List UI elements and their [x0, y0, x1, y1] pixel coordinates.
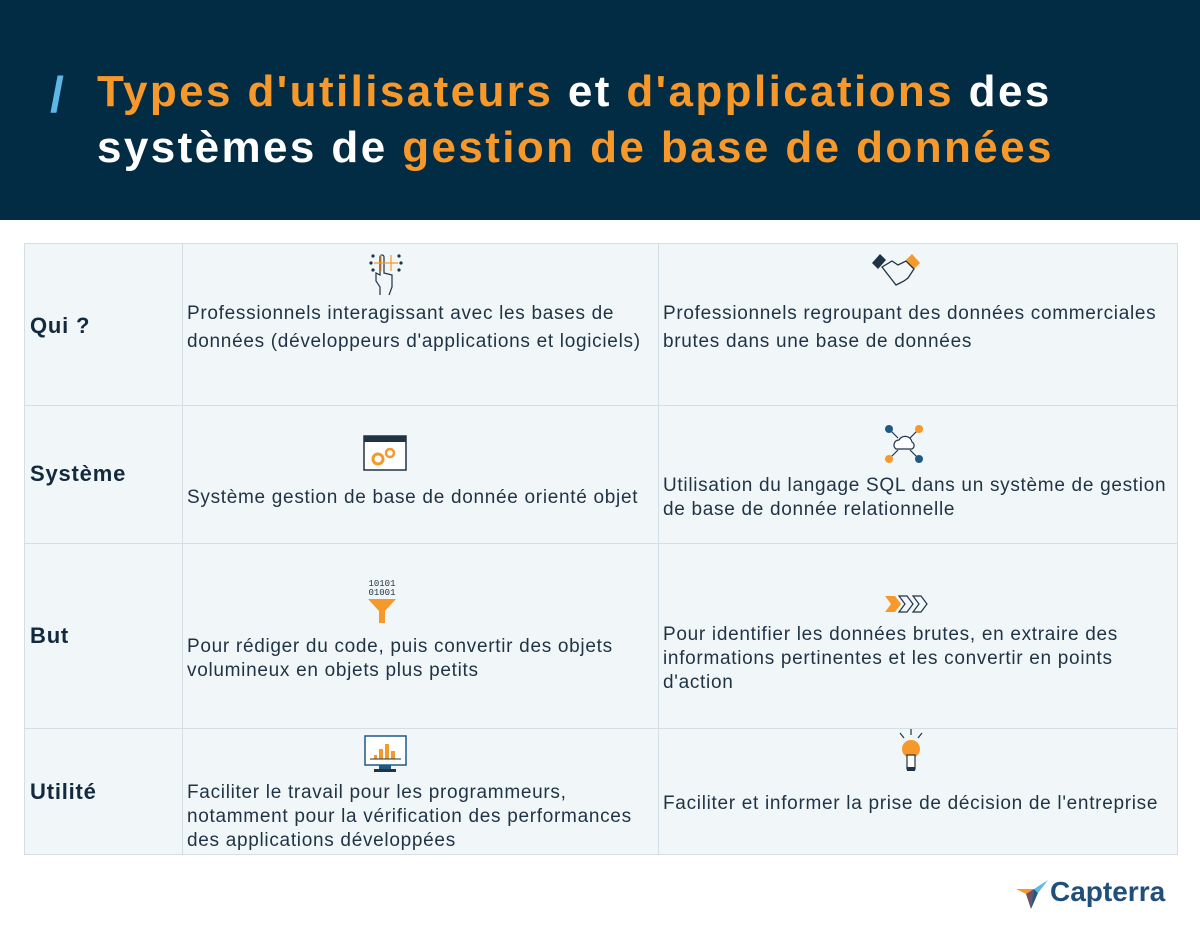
icon: monitor chart [364, 735, 407, 772]
text: qui col1: Professionnels interagissant avec les bases de [187, 303, 614, 324]
text: systeme col1: Système gestion de base de donnée orienté objet [187, 487, 638, 508]
title [97, 67, 1054, 172]
slash accent: / [50, 67, 64, 123]
text: qui col2: brutes dans une base de données [663, 331, 972, 352]
text: qui col2 [663, 303, 1156, 352]
text: but col1 [187, 636, 613, 681]
text: but col1: volumineux en objets plus petits [187, 660, 479, 681]
text: systeme col2 [663, 475, 1166, 520]
table [24, 243, 1178, 855]
text: utilite col2: Faciliter et informer la prise de décision de l'entreprise [663, 793, 1158, 814]
text: but col2: Pour identifier les données brutes, en extraire des [663, 624, 1118, 645]
text: but col2: informations pertinentes et les convertir en points [663, 648, 1113, 669]
icon: gears window [363, 435, 407, 471]
logo: Capterra: Capterra [1050, 876, 1165, 907]
icon: binary funnel [368, 579, 396, 623]
icon: binary funnel: 01001 [368, 588, 396, 598]
text: qui col1 [187, 303, 641, 352]
text: systeme col2: de base de donnée relationnelle [663, 499, 955, 520]
text: but col1: Pour rédiger du code, puis convertir des objets [187, 636, 613, 657]
row label: Utilité: Utilité [30, 779, 97, 804]
title: Types d'utilisateurs et d'applications des [97, 67, 1052, 116]
icon: touch hand [369, 254, 403, 296]
text: utilite col1: notamment pour la vérification des performances [187, 806, 632, 827]
text: utilite col1 [187, 782, 632, 851]
header band [0, 0, 1200, 220]
text: qui col1: données (développeurs d'applications et logiciels) [187, 331, 641, 352]
row label: Système: Système [30, 461, 126, 486]
icon: lightbulb [900, 729, 922, 771]
text: but col2 [663, 624, 1118, 693]
text: systeme col2: Utilisation du langage SQL dans un système de gestion [663, 475, 1166, 496]
text: but col2: d'action [663, 672, 734, 693]
icon: chevrons [885, 595, 928, 613]
icon: binary funnel: 10101 [368, 579, 396, 589]
text: utilite col1: Faciliter le travail pour les programmeurs, [187, 782, 567, 803]
icon: cloud network [885, 425, 923, 463]
text: qui col2: Professionnels regroupant des données commerciales [663, 303, 1156, 324]
title: systèmes de gestion de base de données [97, 123, 1054, 172]
row label: Qui: Qui ? [30, 313, 90, 338]
icon: handshake [872, 254, 920, 286]
row label: But: But [30, 623, 69, 648]
text: utilite col1: des applications développées [187, 830, 456, 851]
